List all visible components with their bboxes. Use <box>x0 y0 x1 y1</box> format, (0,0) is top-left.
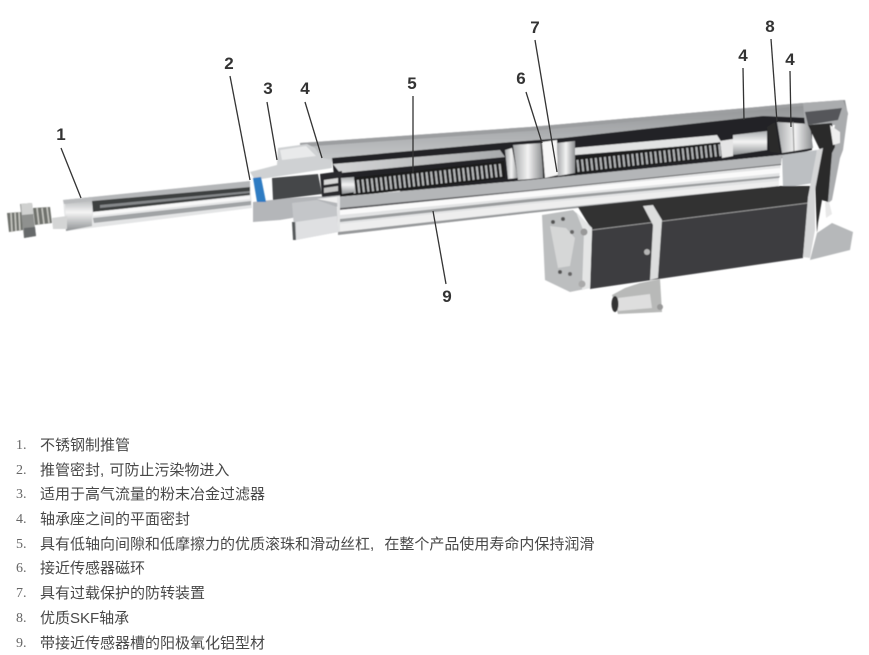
item 2: 2. <box>16 463 26 478</box>
actuator cutaway illustration <box>6 17 854 314</box>
item 5: 5. <box>16 537 26 552</box>
callout 9: 9 <box>442 287 452 306</box>
callout 8: 8 <box>765 17 775 36</box>
right end cap <box>782 100 848 233</box>
item 9: 带接近传感器槽的阳极氧化铝型材 <box>40 635 265 652</box>
callout 6: 6 <box>516 69 526 88</box>
item 8: 8. <box>16 611 26 626</box>
ball screw right <box>575 139 733 174</box>
callout 1 <box>56 125 81 198</box>
callout 3 <box>263 79 277 160</box>
left end head <box>250 144 400 240</box>
item 1: 不锈钢制推管 <box>40 437 130 454</box>
callout 3: 3 <box>263 79 273 98</box>
screw shaft and bearing <box>733 122 813 155</box>
item 7: 具有过载保护的防转装置 <box>40 585 205 602</box>
callout 5 <box>407 74 417 173</box>
callout 9 <box>433 211 452 306</box>
callout 4 left <box>300 79 322 158</box>
motor <box>578 186 812 289</box>
callout 1: 1 <box>56 125 66 144</box>
item 9: 9. <box>16 636 26 651</box>
piston rod <box>63 181 252 231</box>
ball nut and magnet ring <box>505 140 575 180</box>
callout 4 right: 4 <box>785 50 795 69</box>
callout 7 <box>530 18 557 172</box>
threaded rod end <box>7 203 67 238</box>
motor front flange <box>542 210 592 292</box>
callout 2 <box>224 54 250 180</box>
item 2: 推管密封, 可防止污染物进入 <box>40 462 229 479</box>
callout 4 middle <box>738 46 748 120</box>
callout 2: 2 <box>224 54 234 73</box>
item 3: 3. <box>16 487 26 502</box>
item 4: 轴承座之间的平面密封 <box>40 511 190 528</box>
callout 4 right <box>785 50 795 127</box>
callout 5: 5 <box>407 74 417 93</box>
rear guide bushing <box>320 171 342 197</box>
blue rod seal <box>253 177 266 202</box>
item 5: 具有低轴向间隙和低摩擦力的优质滚珠和滑动丝杠, 在整个产品使用寿命内保持润滑 <box>40 536 594 553</box>
aluminium profile <box>337 155 782 235</box>
right end plate and base <box>803 148 853 260</box>
callout 7: 7 <box>530 18 540 37</box>
wiper ring <box>272 174 322 200</box>
ball screw left <box>340 161 505 198</box>
parts list <box>16 437 594 652</box>
item 1: 1. <box>16 438 26 453</box>
callout 4 left: 4 <box>300 79 310 98</box>
item 3: 适用于高气流量的粉末冶金过滤器 <box>40 486 265 503</box>
callout 4 middle: 4 <box>738 46 748 65</box>
callout 8 <box>765 17 777 122</box>
item 6: 6. <box>16 561 26 576</box>
item 4: 4. <box>16 512 26 527</box>
item 7: 7. <box>16 586 26 601</box>
motor connector <box>612 279 663 314</box>
item 6: 接近传感器磁环 <box>40 560 145 577</box>
interior cavity <box>332 116 812 200</box>
main housing top band <box>300 100 848 162</box>
item 8: 优质SKF轴承 <box>40 610 129 627</box>
callout 6 <box>516 69 542 143</box>
